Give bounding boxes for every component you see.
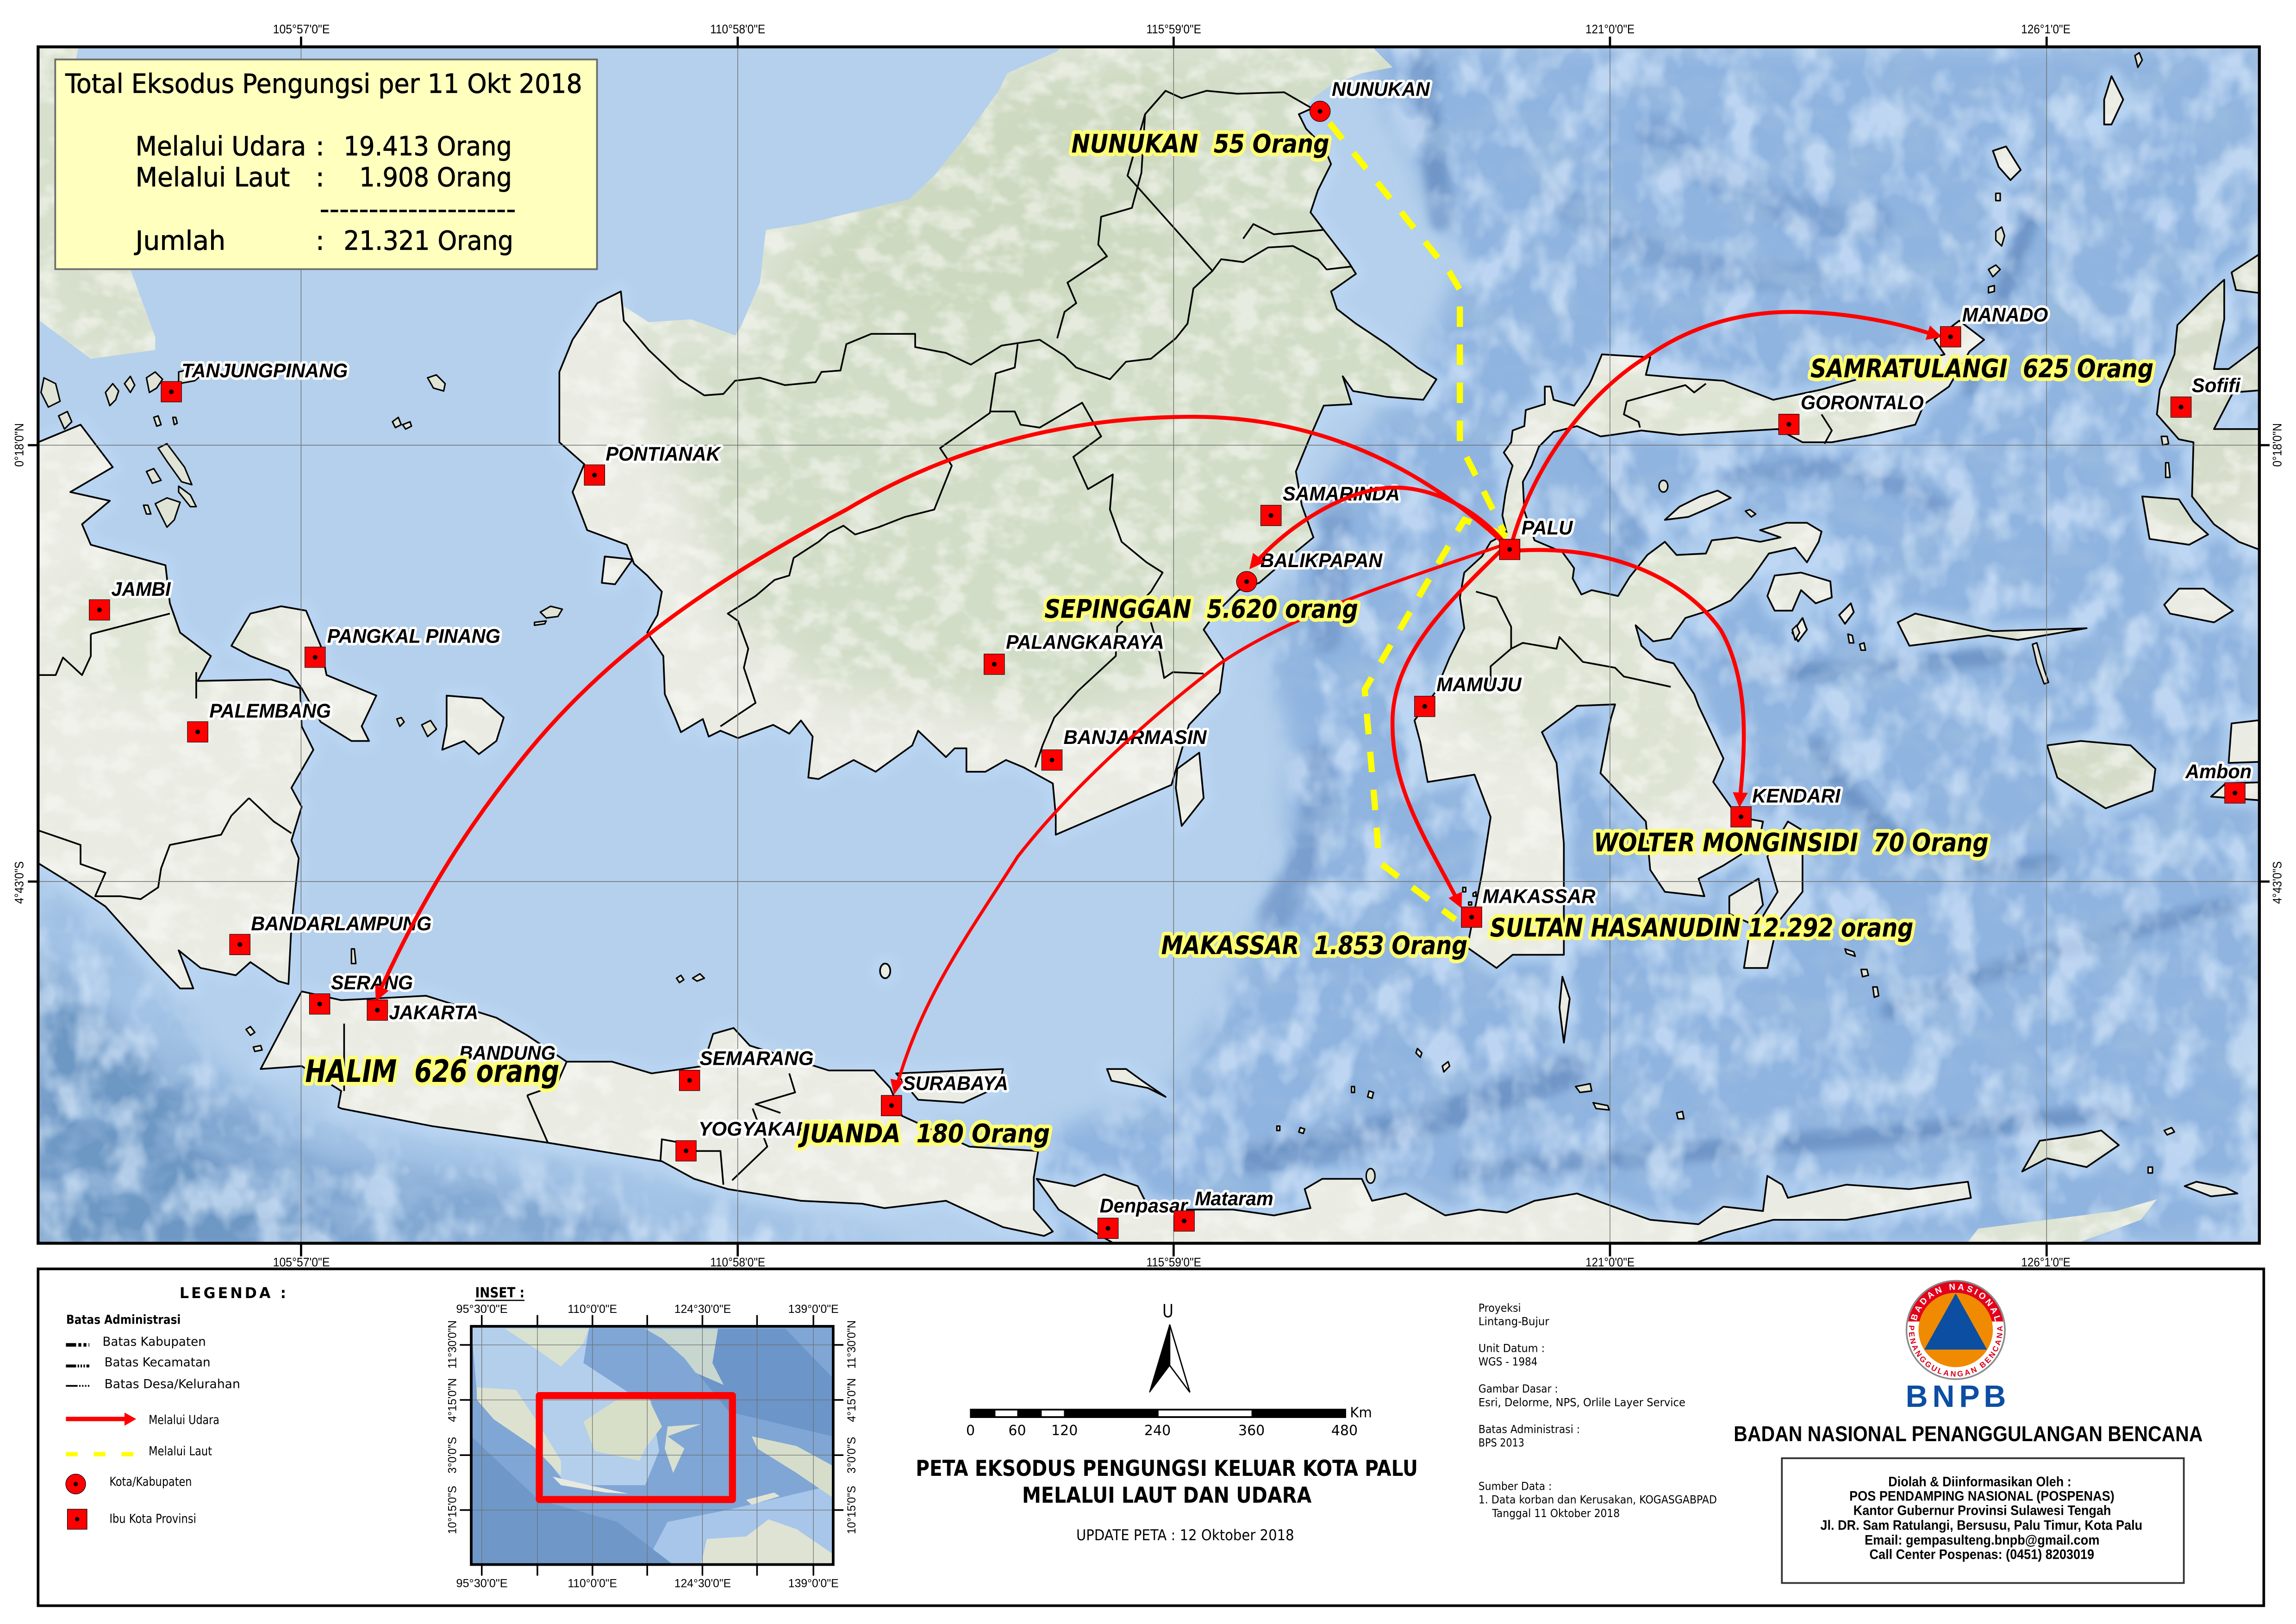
map notes: Lintang-Bujur bbox=[1479, 1315, 1549, 1328]
arrow: Palu to Wolter Monginsidi Kendari bbox=[1517, 550, 1747, 806]
city labels: PALEMBANG bbox=[209, 700, 331, 722]
inset coordinate labels bbox=[446, 1303, 858, 1590]
map frame and ticks bbox=[28, 37, 2270, 1256]
icon: BNPB logo bbox=[1907, 1281, 2005, 1379]
contact box: Email: gempasulteng.bnpb@gmail.com bbox=[1865, 1533, 2099, 1548]
inset heading: INSET : bbox=[475, 1285, 524, 1301]
arrow: Palu to Halim Jakarta bbox=[376, 417, 1502, 1000]
bottom information panel bbox=[38, 1269, 2264, 1605]
airport and port passenger count callouts: SEPINGGAN 5.620 orang bbox=[1044, 595, 1358, 625]
map notes: 1. Data korban dan Kerusakan, KOGASGABPAD bbox=[1479, 1493, 1717, 1506]
title: MELALUI LAUT DAN UDARA bbox=[1022, 1483, 1312, 1508]
scale bar: Km bbox=[1350, 1405, 1372, 1421]
sea background and bathymetry bbox=[29, 47, 2270, 1259]
summary row: air: Melalui Udara bbox=[136, 131, 306, 162]
city labels: BANJARMASIN bbox=[1063, 726, 1207, 749]
city labels: JAMBI bbox=[111, 578, 171, 600]
coordinate labels: 115°59'0"E bbox=[1147, 1255, 1201, 1269]
city labels: PALANGKARAYA bbox=[1006, 631, 1164, 653]
marker centre dots bbox=[97, 109, 2237, 1230]
airport and port passenger count callouts bbox=[305, 130, 2153, 1149]
city labels: MAMUJU bbox=[1436, 674, 1522, 696]
city labels: GORONTALO bbox=[1801, 392, 1924, 414]
map notes: Tanggal 11 Oktober 2018 bbox=[1491, 1507, 1620, 1520]
legend: sea route: Melalui Laut bbox=[149, 1444, 212, 1459]
coordinate labels: 126°1'0"E bbox=[2021, 1255, 2071, 1269]
legend bbox=[66, 1285, 286, 1529]
summary row: total bbox=[134, 225, 513, 256]
coordinate labels: 4°43'0"S bbox=[2270, 862, 2284, 904]
arrow: Palu to Sepinggan Balikpapan bbox=[1250, 487, 1502, 568]
icon: north arrow bbox=[1149, 1300, 1190, 1393]
city labels: BANDUNG bbox=[459, 1042, 555, 1064]
icon: BNPB logo: PENANGGULANGAN BENCANA bbox=[1907, 1325, 2004, 1379]
arrow: Palu to Samratulangi Manado bbox=[1513, 312, 1941, 540]
contact box: Diolah & Diinformasikan Oleh : bbox=[1888, 1474, 2071, 1490]
summary divider: -------------------- bbox=[320, 194, 516, 225]
agency name: BADAN NASIONAL PENANGGULANGAN BENCANA bbox=[1734, 1422, 2202, 1446]
arrow: Palu to Sultan Hasanudin Makassar bbox=[1392, 550, 1501, 907]
city labels: SERANG bbox=[331, 972, 413, 994]
map notes: BPS 2013 bbox=[1479, 1437, 1524, 1449]
airport and port passenger count callouts: SAMRATULANGI 625 Orang bbox=[1810, 354, 2153, 384]
city labels: BANDARLAMPUNG bbox=[251, 912, 431, 935]
map notes: Gambar Dasar : bbox=[1479, 1382, 1558, 1395]
inset coordinate labels: 95°30'0"E bbox=[456, 1303, 508, 1316]
coordinate labels: 121°0'0"E bbox=[1585, 22, 1635, 36]
legend: subdistrict boundary: Batas Kecamatan bbox=[105, 1355, 211, 1369]
title: PETA EKSODUS PENGUNGSI KELUAR KOTA PALU bbox=[916, 1456, 1418, 1481]
summary row: air: 19.413 Orang bbox=[343, 131, 512, 162]
coordinate labels: 105°57'0"E bbox=[273, 22, 330, 36]
inset coordinate labels: 10°15'0"S bbox=[845, 1486, 858, 1534]
airport and port passenger count callouts: SULTAN HASANUDIN 12.292 orang bbox=[1490, 913, 1913, 943]
map notes: Batas Administrasi : bbox=[1479, 1423, 1580, 1436]
map notes: WGS - 1984 bbox=[1479, 1355, 1537, 1368]
land masses bbox=[22, 0, 2284, 1259]
summary row: sea: : bbox=[316, 162, 324, 193]
update date: UPDATE PETA : 12 Oktober 2018 bbox=[1076, 1527, 1294, 1544]
summary row: sea bbox=[136, 162, 512, 193]
summary box bbox=[55, 59, 597, 269]
city labels: JAKARTA bbox=[389, 1002, 478, 1024]
inset coordinate labels: 3°0'0"S bbox=[845, 1437, 858, 1474]
city labels: PANGKAL PINANG bbox=[327, 625, 500, 648]
city labels: SAMARINDA bbox=[1283, 483, 1400, 505]
city labels: PONTIANAK bbox=[605, 443, 722, 465]
coordinate labels bbox=[12, 22, 2284, 1269]
inset coordinate labels: 95°30'0"E bbox=[456, 1577, 508, 1590]
inset coordinate labels: 11°30'0"N bbox=[446, 1320, 459, 1368]
coordinate labels: 110°58'0"E bbox=[710, 22, 765, 36]
contact box: Call Center Pospenas: (0451) 8203019 bbox=[1870, 1547, 2094, 1562]
inset extent rectangle bbox=[539, 1396, 732, 1499]
city labels: PALU bbox=[1522, 517, 1573, 539]
scale bar: 120 bbox=[1051, 1423, 1078, 1439]
coordinate labels: 121°0'0"E bbox=[1585, 1255, 1635, 1269]
agency acronym: B N P B bbox=[1906, 1380, 2006, 1414]
inset coordinate labels: 124°30'0"E bbox=[674, 1577, 731, 1590]
icon: north arrow: U bbox=[1162, 1300, 1173, 1322]
city labels: Denpasar bbox=[1100, 1195, 1189, 1217]
city labels: TANJUNGPINANG bbox=[181, 360, 348, 382]
scale bar: 480 bbox=[1331, 1423, 1358, 1439]
airport and port passenger count callouts: JUANDA 180 Orang bbox=[798, 1119, 1050, 1149]
legend subheading: Batas Administrasi bbox=[66, 1313, 181, 1327]
map panel bbox=[12, 0, 2284, 1269]
scale bar: 0 bbox=[966, 1423, 975, 1439]
inset coordinate labels: 10°15'0"S bbox=[446, 1486, 459, 1534]
city labels: Sofifi bbox=[2192, 375, 2241, 397]
summary row: total: Jumlah bbox=[134, 225, 225, 256]
legend: provincial capital marker: Ibu Kota Provinsi bbox=[109, 1512, 196, 1526]
map notes: Unit Datum : bbox=[1479, 1342, 1545, 1355]
inset coordinate labels: 110°0'0"E bbox=[568, 1303, 617, 1316]
legend: city marker: Kota/Kabupaten bbox=[109, 1475, 192, 1489]
city labels: KENDARI bbox=[1752, 785, 1841, 807]
city labels: MANADO bbox=[1962, 304, 2048, 326]
city labels: BALIKPAPAN bbox=[1260, 550, 1383, 572]
coastlines and administrative boundaries bbox=[29, 53, 2270, 1259]
summary row: total: 21.321 Orang bbox=[343, 225, 513, 256]
air routes (red arrows) bbox=[376, 312, 1941, 1093]
inset coordinate labels: 110°0'0"E bbox=[568, 1577, 617, 1590]
legend: air route: Melalui Udara bbox=[149, 1413, 219, 1427]
markers: provincial capitals bbox=[89, 101, 2245, 1238]
coordinate labels: 105°57'0"E bbox=[273, 1255, 330, 1269]
title bbox=[916, 1456, 1418, 1508]
inset coordinate labels: 139°0'0"E bbox=[788, 1303, 839, 1316]
contact box: Jl. DR. Sam Ratulangi, Bersusu, Palu Timur, Kota Palu bbox=[1821, 1518, 2142, 1533]
contact box: Kantor Gubernur Provinsi Sulawesi Tengah bbox=[1853, 1503, 2111, 1518]
scale bar bbox=[966, 1405, 1372, 1439]
city labels: YOGYAKARTA bbox=[699, 1118, 835, 1140]
city labels: Ambon bbox=[2185, 761, 2252, 783]
legend: air route bbox=[66, 1412, 219, 1427]
legend: provincial capital marker bbox=[68, 1509, 196, 1529]
inset coordinate labels: 124°30'0"E bbox=[674, 1303, 731, 1316]
inset coordinate labels: 139°0'0"E bbox=[788, 1577, 839, 1590]
coordinate labels: 4°43'0"S bbox=[12, 862, 26, 904]
coordinate labels: 110°58'0"E bbox=[710, 1255, 765, 1269]
summary row: air: : bbox=[316, 131, 324, 162]
summary row: sea: Melalui Laut bbox=[136, 162, 290, 193]
coordinate labels: 126°1'0"E bbox=[2021, 22, 2071, 36]
city labels bbox=[111, 78, 2252, 1217]
map notes bbox=[1479, 1301, 1717, 1520]
contact box bbox=[1782, 1458, 2184, 1583]
summary row: total: : bbox=[316, 225, 324, 256]
contact box: POS PENDAMPING NASIONAL (POSPENAS) bbox=[1849, 1488, 2115, 1504]
city labels: MAKASSAR bbox=[1483, 885, 1596, 907]
summary row: sea: 1.908 Orang bbox=[359, 162, 512, 193]
map notes: Proyeksi bbox=[1479, 1301, 1521, 1314]
airport and port passenger count callouts: NUNUKAN 55 Orang bbox=[1072, 130, 1329, 159]
airport and port passenger count callouts: HALIM 626 orang bbox=[305, 1053, 559, 1089]
scale bar: 360 bbox=[1238, 1423, 1265, 1439]
coordinate labels: 115°59'0"E bbox=[1147, 22, 1201, 36]
map notes: Sumber Data : bbox=[1479, 1480, 1552, 1493]
city labels: Mataram bbox=[1195, 1187, 1273, 1210]
city labels: NUNUKAN bbox=[1332, 78, 1430, 100]
inset coordinate labels: 11°30'0"N bbox=[845, 1320, 858, 1368]
sea routes (yellow dashed) bbox=[1329, 123, 1507, 919]
summary heading: Total Eksodus Pengungsi per 11 Okt 2018 bbox=[65, 69, 582, 100]
scale bar: 60 bbox=[1008, 1423, 1026, 1439]
city labels: SURABAYA bbox=[903, 1072, 1008, 1094]
legend: city marker bbox=[66, 1474, 192, 1494]
scale bar: 240 bbox=[1144, 1423, 1171, 1439]
legend: district boundary: Batas Kabupaten bbox=[102, 1335, 206, 1349]
city labels: SEMARANG bbox=[699, 1048, 814, 1070]
inset coordinate labels: 3°0'0"S bbox=[446, 1437, 459, 1474]
inset coordinate labels: 4°15'0"N bbox=[845, 1378, 858, 1422]
inset coordinate labels: 4°15'0"N bbox=[446, 1378, 459, 1422]
legend heading: LEGENDA : bbox=[180, 1285, 286, 1302]
legend: village boundary: Batas Desa/Kelurahan bbox=[105, 1377, 240, 1392]
arrow: Palu to Juanda Surabaya bbox=[891, 546, 1499, 1093]
summary row: air bbox=[136, 131, 512, 162]
airport and port passenger count callouts: WOLTER MONGINSIDI 70 Orang bbox=[1594, 828, 1989, 858]
coordinate labels: 0°18'0"N bbox=[12, 423, 26, 467]
inset locator map bbox=[446, 1303, 858, 1590]
coordinate labels: 0°18'0"N bbox=[2270, 423, 2284, 467]
airport and port passenger count callouts: MAKASSAR 1.853 Orang bbox=[1161, 931, 1467, 961]
graticule grid lines bbox=[38, 47, 2259, 1243]
map notes: Esri, Delorme, NPS, Orlile Layer Service bbox=[1479, 1396, 1685, 1409]
icon: BNPB logo: BADAN NASIONAL bbox=[1909, 1282, 2003, 1322]
